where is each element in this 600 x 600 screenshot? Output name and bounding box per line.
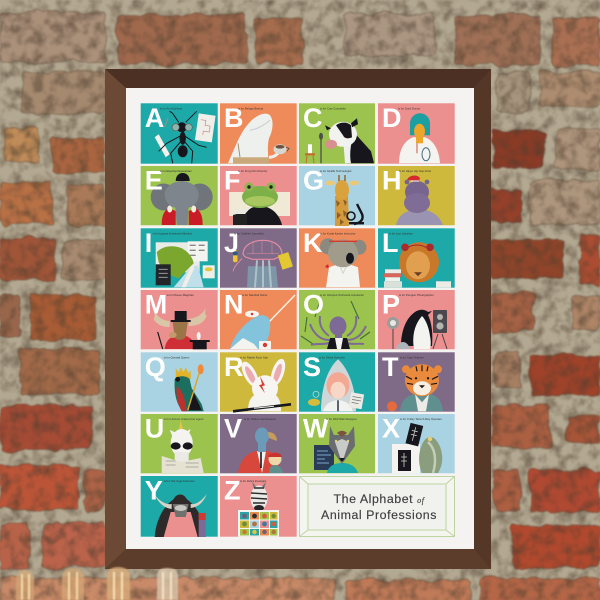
- tile I: iguana investment banker: is for Iguana Investment Banker: [153, 231, 192, 235]
- tile K: koala karate instructor: K: [303, 228, 323, 258]
- tile R: rabbit rock star: R: [224, 352, 244, 382]
- poster title: The Alphabet of: [334, 492, 426, 506]
- tile N: narwhal nurse: N: [224, 290, 244, 320]
- tile W: wolf web designer: is for Wolf Web Designer: [326, 417, 357, 421]
- tile E: elephant equestrian: E: [145, 166, 163, 196]
- white poster mat: [126, 88, 474, 549]
- tile J: jellyfish journalist: [220, 228, 297, 288]
- tile H: hippo hip hop artist: is for Hippo Hip Hop Artist: [399, 169, 431, 173]
- tile O: octopus orchestra conductor: O: [303, 290, 324, 320]
- tile S: shark scientist: S: [303, 352, 321, 382]
- tile B: beluga barista: [220, 103, 297, 164]
- tile V: vulture ventriloquist: V: [224, 414, 242, 444]
- bulb 4: [157, 568, 178, 600]
- tile D: duck doctor: is for Duck Doctor: [398, 106, 420, 110]
- tile W: wolf web designer: W: [303, 414, 329, 444]
- tile A: ant architect: is for Ant Architect: [160, 106, 182, 110]
- tile K: koala karate instructor: is for Koala Karate Instructor: [320, 231, 356, 235]
- tile D: duck doctor: D: [382, 103, 402, 133]
- tile Q: quetzal queen: [141, 352, 218, 412]
- tile G: giraffe technologist: G: [303, 166, 324, 196]
- wooden frame: [105, 69, 491, 569]
- tile V: vulture ventriloquist: [220, 414, 297, 473]
- tile B: beluga barista: B: [224, 103, 244, 133]
- tile E: elephant equestrian: is for Elephant Equestrian: [160, 169, 192, 173]
- tile P: penguin photographer: is for Penguin Photographer: [399, 293, 434, 297]
- tile A: ant architect: A: [145, 103, 164, 133]
- tile X: x-ray tetra x-ray operator: is for X-Ray Tetra X-Ray Operator: [400, 417, 442, 421]
- tile Q: quetzal queen: Q: [145, 352, 166, 382]
- tile Z: zebra zoologist: Z: [224, 476, 240, 506]
- tile U: unicorn undercover agent: is for Unicorn Undercover Agent: [164, 417, 204, 421]
- tile T: tiger teacher: T: [382, 352, 399, 382]
- tile R: rabbit rock star: is for Rabbit Rock Star: [240, 355, 268, 359]
- tile C: cow comedian: C: [303, 103, 322, 133]
- tile L: lion librarian: [378, 228, 455, 288]
- tile Q: quetzal queen: is for Quetzal Queen: [164, 355, 190, 359]
- tile M: moose magician: M: [145, 290, 167, 320]
- tile R: rabbit rock star: [220, 352, 297, 412]
- tile I: iguana investment banker: [141, 228, 218, 288]
- tile L: lion librarian: L: [382, 228, 398, 258]
- tile F: frog film director: is for Frog Film Director: [238, 169, 267, 173]
- tile J: jellyfish journalist: is for Jellyfish Journalist: [234, 231, 264, 235]
- tile V: vulture ventriloquist: is for Vulture Ventriloquist: [244, 417, 276, 421]
- edison bulbs: [16, 567, 178, 600]
- tile O: octopus orchestra conductor: is for Octopus Orchestra Conductor: [320, 293, 364, 297]
- tile P: penguin photographer: [378, 290, 455, 349]
- tile U: unicorn undercover agent: [141, 414, 218, 473]
- tile I: iguana investment banker: I: [145, 228, 152, 258]
- bulb 1: [16, 570, 34, 600]
- tile O: octopus orchestra conductor: [299, 290, 375, 349]
- tile C: cow comedian: [299, 103, 375, 164]
- bulb 3: [107, 567, 130, 600]
- poster grid: [141, 103, 455, 537]
- tile L: lion librarian: is for Lion Librarian: [389, 231, 413, 235]
- tile D: duck doctor: [378, 103, 455, 164]
- tile J: jellyfish journalist: J: [224, 228, 239, 258]
- tile X: x-ray tetra x-ray operator: [378, 414, 455, 473]
- tile Z: zebra zoologist: is for Zebra Zoologist: [240, 479, 266, 483]
- tile T: tiger teacher: [378, 352, 455, 412]
- tile A: ant architect: [141, 103, 218, 164]
- tile T: tiger teacher: is for Tiger Teacher: [400, 355, 424, 359]
- tile C: cow comedian: is for Cow Custodian: [320, 106, 346, 110]
- tile G: giraffe technologist: [299, 166, 375, 226]
- tile F: frog film director: [220, 166, 297, 225]
- tile S: shark scientist: is for Shark Scientist: [319, 355, 345, 359]
- tile M: moose magician: is for Moose Magician: [167, 293, 194, 297]
- tile U: unicorn undercover agent: U: [145, 414, 164, 444]
- tile W: wolf web designer: [299, 414, 375, 473]
- title plate: Animal Professions: [321, 508, 437, 522]
- tile X: x-ray tetra x-ray operator: X: [382, 414, 400, 444]
- tile S: shark scientist: [299, 352, 375, 412]
- tile E: elephant equestrian: [141, 166, 218, 225]
- tile Y: yak yoga instructor: Y: [145, 476, 163, 506]
- title plate: [299, 476, 455, 537]
- tile M: moose magician: [141, 290, 218, 349]
- tile K: koala karate instructor: [299, 228, 375, 288]
- tile G: giraffe technologist: is for Giraffe Technologist: [320, 169, 352, 173]
- mini animal board: [240, 512, 278, 536]
- tile P: penguin photographer: P: [382, 290, 400, 320]
- bulb 2: [62, 568, 84, 600]
- tile Z: zebra zoologist: [220, 476, 297, 537]
- tile H: hippo hip hop artist: [378, 166, 455, 225]
- tile N: narwhal nurse: [220, 290, 297, 349]
- tile Y: yak yoga instructor: is for Yak Yoga Instructor: [164, 479, 195, 483]
- tile N: narwhal nurse: is for Narwhal Nurse: [242, 293, 268, 297]
- tile H: hippo hip hop artist: H: [382, 166, 402, 196]
- tile Y: yak yoga instructor: [141, 476, 218, 537]
- tile B: beluga barista: is for Beluga Barista: [238, 106, 263, 110]
- tile F: frog film director: F: [224, 166, 240, 196]
